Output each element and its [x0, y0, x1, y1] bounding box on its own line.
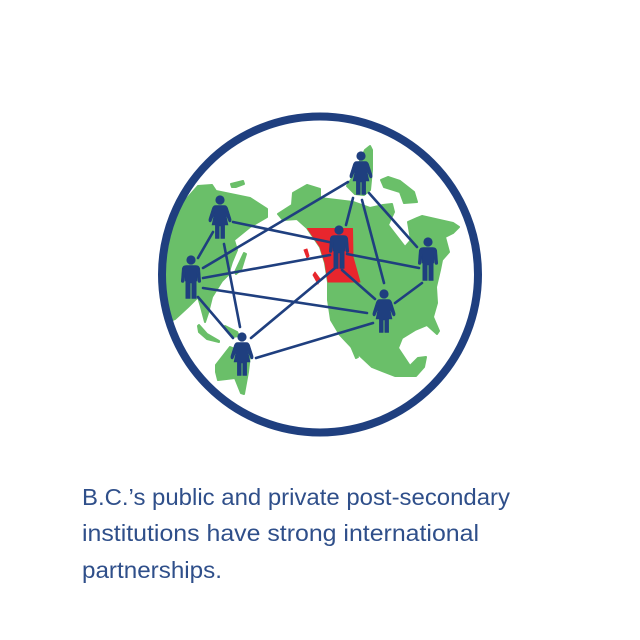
land: Sumatra arc: [198, 325, 219, 342]
land: northern island: [231, 181, 244, 187]
person: centre: [329, 225, 349, 268]
person: bottom: [231, 332, 253, 376]
person: lower right: [373, 289, 395, 332]
person: left: [181, 255, 201, 298]
caption text: partnerships.: [82, 557, 222, 583]
land: Asia: [166, 184, 268, 323]
region: British Columbia: [304, 228, 360, 284]
person: right: [418, 237, 438, 280]
globe: [150, 116, 478, 432]
land: island chain: [235, 253, 246, 274]
person: upper left: [209, 195, 231, 238]
land: Arctic island: [381, 177, 417, 203]
landmasses: [150, 146, 459, 394]
caption text: B.C.’s public and private post-secondary: [82, 484, 510, 510]
region: Haida Gwaii: [304, 249, 309, 258]
infographic canvas: [84, 112, 510, 583]
land: North America: [278, 185, 459, 376]
land: Baja California: [350, 347, 359, 359]
caption text: [82, 484, 510, 583]
land: Australia: [216, 347, 250, 394]
person: top: [350, 151, 372, 194]
caption text: institutions have strong international: [82, 520, 479, 546]
network connection lines: [198, 182, 422, 358]
region: Vancouver Island: [313, 272, 320, 284]
land: Greenland: [347, 146, 372, 195]
land: New Guinea: [225, 326, 239, 337]
globe outline ring: [162, 116, 478, 432]
